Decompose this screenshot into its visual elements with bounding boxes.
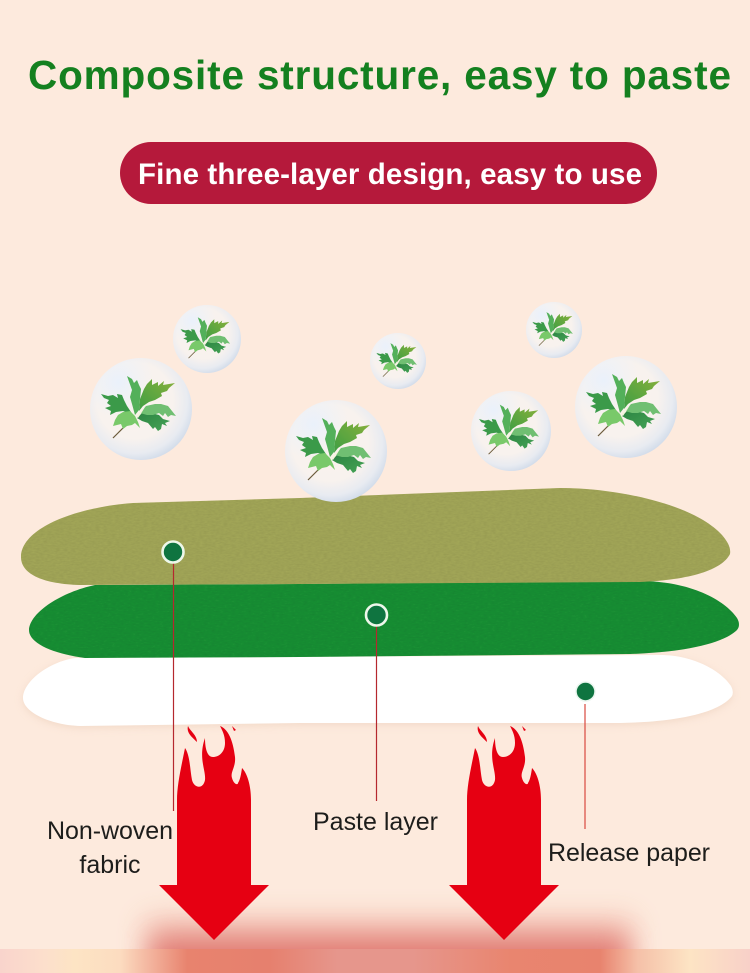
layer: release paper [23,655,733,728]
subtitle pill [120,142,657,204]
bubble 6 [526,302,582,358]
callout: non-woven fabric: fabric [79,851,141,879]
bubble 3 [370,333,426,389]
arrow: right flame [449,726,559,940]
bubble 1 [90,358,192,460]
callout: release paper [548,682,710,867]
layer: non-woven fabric [21,488,730,585]
subtitle pill: Fine three-layer design, easy to use [138,158,642,191]
herb bubbles [90,302,677,502]
bubble 7 [575,356,677,458]
bubble 4 [285,400,387,502]
callout: release paper: Release paper [548,839,710,867]
title: Composite structure, easy to paste [28,52,731,98]
callout: non-woven fabric: Non-woven [47,817,173,845]
bubble 2 [173,305,241,373]
heat glow [0,918,750,973]
bubble 5 [471,391,551,471]
callout: non-woven fabric [47,542,184,879]
callout: paste layer: Paste layer [313,808,438,836]
layer: paste layer [29,581,739,658]
callout: paste layer [313,604,438,836]
arrow: left flame [159,726,269,940]
